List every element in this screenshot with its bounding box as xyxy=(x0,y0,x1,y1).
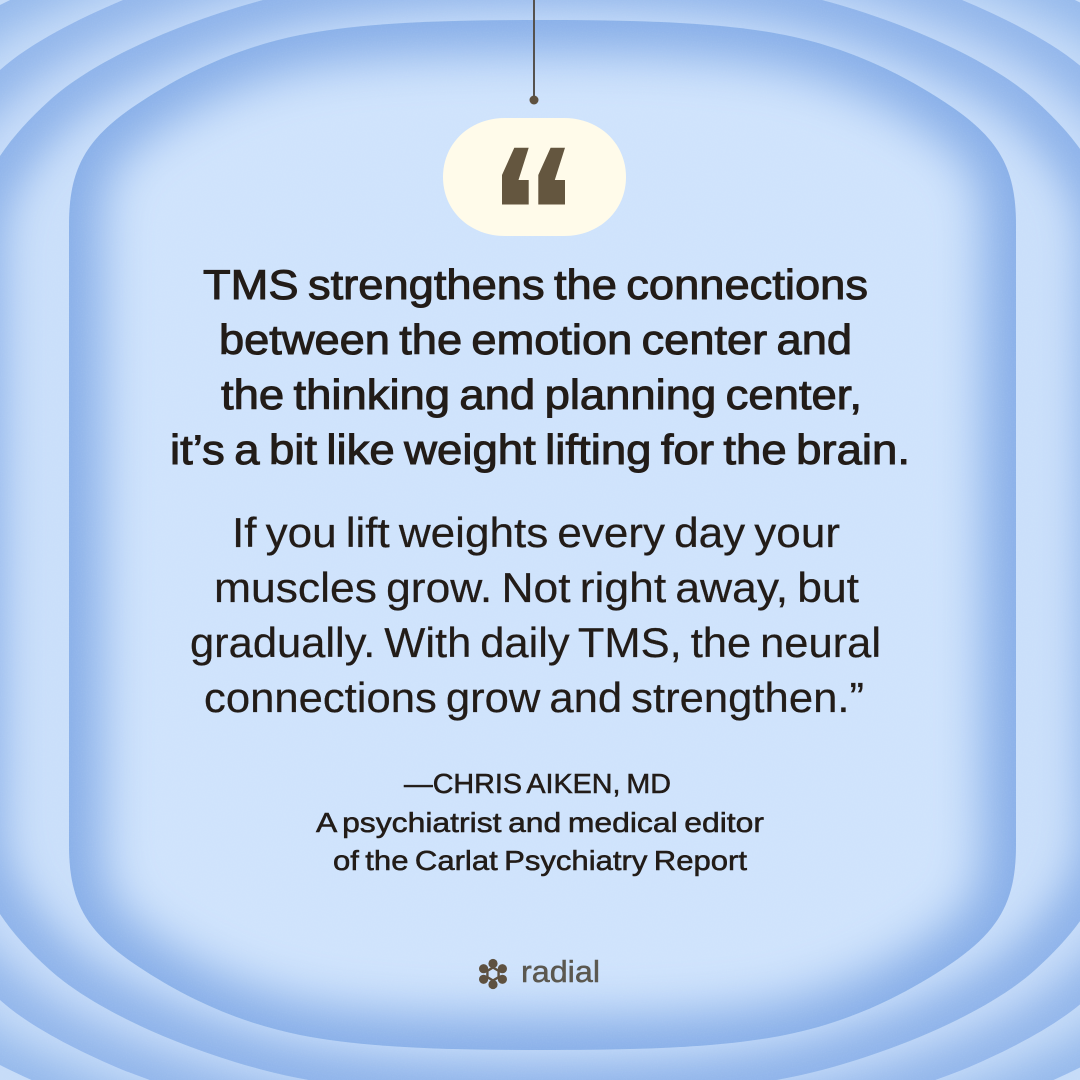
quote badge xyxy=(443,118,626,236)
body quote: gradually. With daily TMS, the neural xyxy=(190,619,881,666)
headline quote xyxy=(170,261,910,473)
connector line with dot xyxy=(530,0,538,104)
attribution: —CHRIS AIKEN, MD xyxy=(404,768,671,799)
attribution xyxy=(316,768,764,876)
headline quote: TMS strengthens the connections xyxy=(203,261,868,308)
attribution: A psychiatrist and medical editor xyxy=(316,807,764,838)
body quote: connections grow and strengthen.” xyxy=(204,674,864,721)
body quote: If you lift weights every day your xyxy=(232,509,840,556)
icon: opening quotation marks xyxy=(502,148,565,204)
logo: radial xyxy=(479,954,600,989)
headline quote: the thinking and planning center, xyxy=(221,371,862,418)
headline quote: it’s a bit like weight lifting for the brain. xyxy=(170,426,910,473)
logo wordmark: radial xyxy=(521,954,600,989)
attribution: of the Carlat Psychiatry Report xyxy=(333,845,747,876)
body quote: muscles grow. Not right away, but xyxy=(214,564,859,611)
headline quote: between the emotion center and xyxy=(219,316,852,363)
icon: radial flower mark xyxy=(479,959,507,989)
body quote xyxy=(190,509,881,721)
